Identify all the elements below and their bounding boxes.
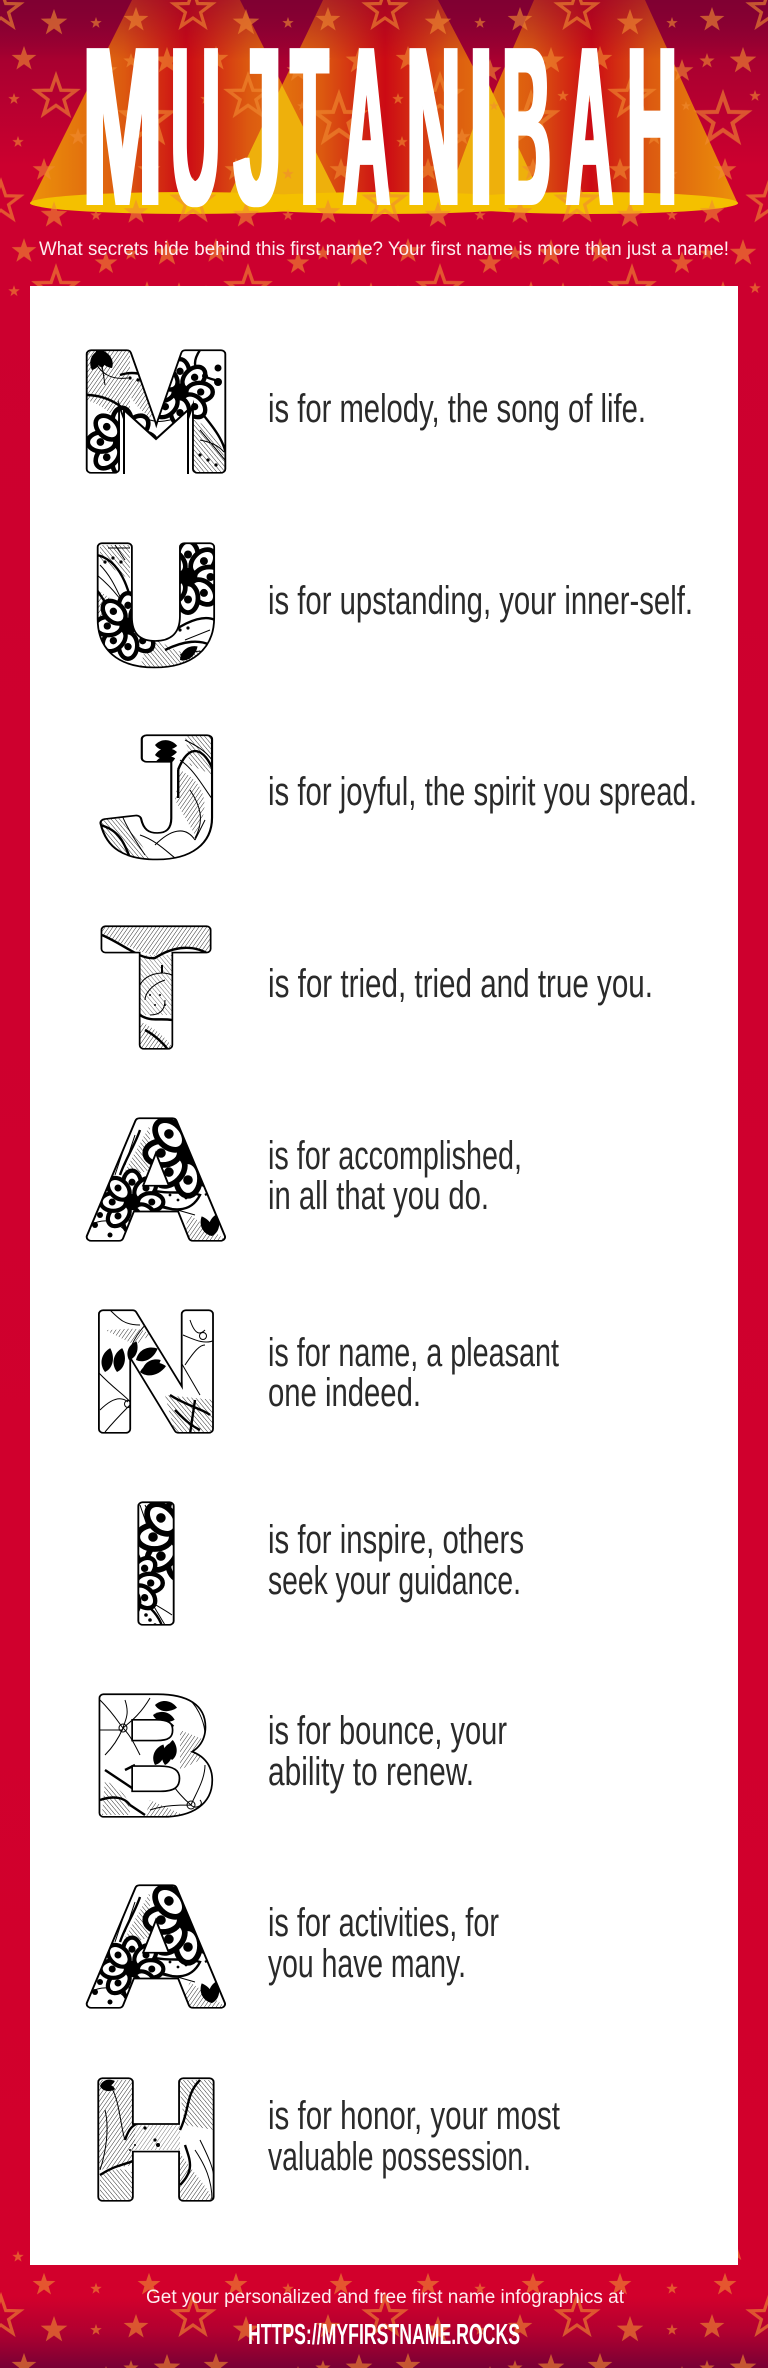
subtitle: What secrets hide behind this first name? Your first name is more than just a name! [39,239,729,260]
icon: letter M: M [79,319,233,505]
icon: letter A [86,1117,226,1242]
text: H line [268,2094,560,2179]
icon: letter N [98,1309,214,1434]
spotlights [0,0,768,214]
icon: letter J: J [102,703,222,890]
text: B line: is for bounce, your [268,1709,507,1753]
text: A line: is for accomplished, [268,1134,522,1178]
icon: letter A: A [86,1087,226,1273]
icon: letter T: T [103,894,209,1080]
text: I line: seek your guidance. [268,1559,521,1603]
icon: letter U: U [91,511,221,698]
text: N line: one indeed. [268,1371,421,1415]
title: N [406,0,461,253]
title: M [82,0,163,254]
title: J [234,0,282,254]
title [82,0,677,254]
icon: letter H [97,2077,215,2202]
title: I [469,0,493,254]
text: A line: is for activities, for [268,1901,499,1945]
text: A line [268,1901,499,1986]
icon: letter N: N [91,1278,221,1465]
text: A line: you have many. [268,1942,466,1986]
icon: letter I [137,1501,175,1626]
icon: letter H: H [90,2047,222,2233]
title: A [566,0,613,254]
title: H [627,0,677,254]
text: I line: is for inspire, others [268,1518,524,1562]
text: H line: valuable possession. [268,2135,531,2179]
title: B [502,0,551,254]
text: H line: is for honor, your most [268,2094,560,2138]
star pattern: bottom [0,2240,768,2368]
text: I line [268,1518,524,1603]
star pattern: top [0,0,768,300]
footer url: HTTPS://MYFIRSTNAME.ROCKS [248,2319,520,2351]
title: T [291,0,328,254]
icon: letter B [98,1693,214,1818]
text: B line [268,1709,507,1794]
text: N line: is for name, a pleasant [268,1331,559,1375]
icon: letter A: A [86,1854,226,2040]
icon: letter U [96,542,216,668]
panel: white letters panel [30,286,738,2265]
icon: letter A [86,1884,226,2009]
icon: letter T [100,925,212,1050]
icon: letter J [99,734,214,860]
text: B line: ability to renew. [268,1750,474,1794]
text: A line [268,1134,522,1218]
title: U [171,0,220,254]
icon: letter B: B [92,1662,216,1848]
footer text: Get your personalized and free first name infographics at [146,2287,625,2308]
icon: letter I: I [130,1471,182,1657]
title: A [343,0,390,254]
text: N line [268,1331,559,1415]
text: A line: in all that you do. [268,1174,489,1218]
icon: letter M [86,349,226,474]
